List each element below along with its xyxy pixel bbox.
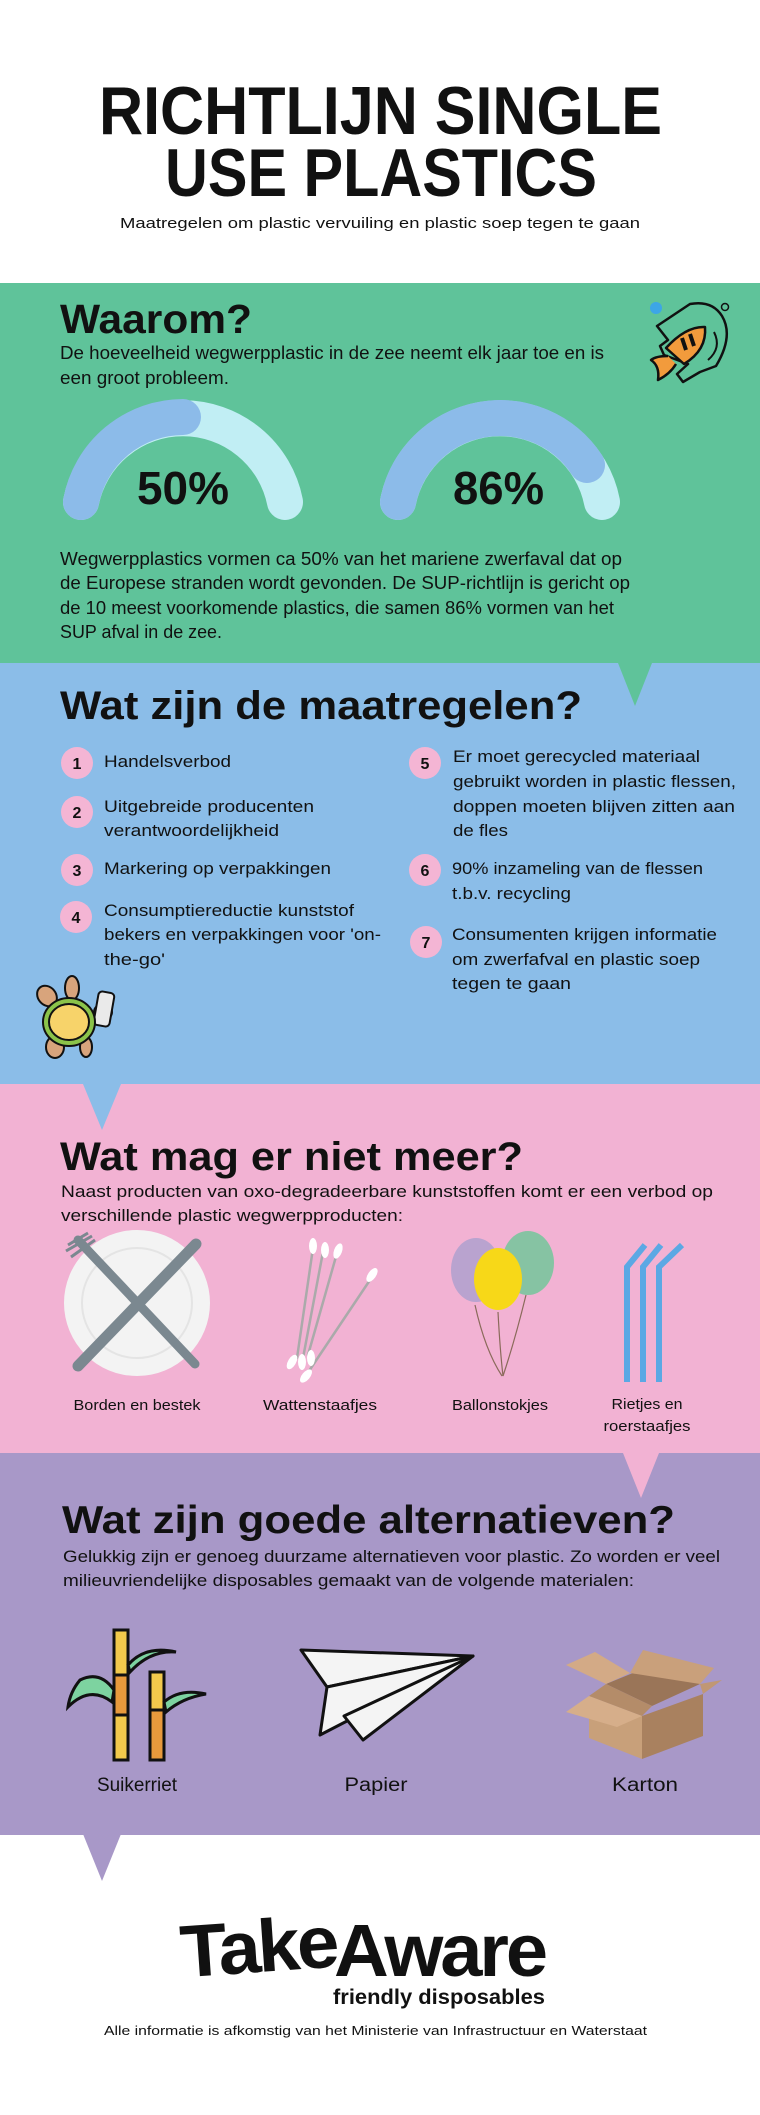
panel: niet meer xyxy=(0,1084,760,1453)
logo: TakeAware: Take xyxy=(177,1900,340,1993)
logo: TakeAware: Aware xyxy=(334,1909,546,1992)
list: measures: de fles xyxy=(453,821,508,840)
list: measures: 4 xyxy=(72,910,81,927)
logo: TakeAware: friendly disposables xyxy=(333,1986,545,2009)
panel: maatregelen xyxy=(0,663,760,1084)
list: measures: 2 xyxy=(73,805,82,822)
labels: materials xyxy=(97,1775,678,1796)
list: measures: 5 xyxy=(421,756,430,773)
list: measures: Markering op verpakkingen xyxy=(104,859,331,878)
list: measures: verantwoordelijkheid xyxy=(104,821,279,840)
icon: paper plane xyxy=(301,1650,473,1740)
icon: plate and cutlery xyxy=(64,1230,210,1376)
labels: materials: Papier xyxy=(344,1775,408,1796)
text block: explanation: SUP afval in de zee. xyxy=(60,622,222,642)
arrow: pink pointer xyxy=(623,1453,659,1498)
list: measures: Consumenten krijgen informatie xyxy=(452,925,717,944)
title xyxy=(99,73,662,211)
list: measures: 6 xyxy=(421,863,430,880)
list: measures: om zwerfafval en plastic soep xyxy=(452,950,700,969)
chart: gauge 86% xyxy=(398,418,602,514)
text block: intro: een groot probleem. xyxy=(60,368,229,388)
arrow: purple pointer xyxy=(83,1834,121,1881)
text block: alternatives intro xyxy=(63,1547,720,1590)
labels: banned items: Borden en bestek xyxy=(74,1397,201,1414)
labels: banned items: Rietjes en xyxy=(612,1396,682,1413)
labels: banned items xyxy=(74,1396,690,1435)
chart: gauge 50%: 50% xyxy=(137,462,229,514)
icon: turtle with bottle xyxy=(33,976,115,1058)
text block: alternatives intro: milieuvriendelijke disposables gemaakt van de volgende materialen: xyxy=(63,1571,634,1590)
text block: ban intro: Naast producten van oxo-degradeerbare kunststoffen komt er een verbod op xyxy=(61,1182,713,1201)
text block: explanation: de 10 meest voorkomende plastics, die samen 86% vormen van het xyxy=(60,598,614,618)
labels: materials: Karton xyxy=(612,1775,678,1796)
icon: straws xyxy=(627,1245,682,1382)
list: measures: Consumptiereductie kunststof xyxy=(104,901,354,920)
text block: explanation: de Europese stranden wordt gevonden. De SUP-richtlijn is gericht op xyxy=(60,573,630,593)
chart: gauge 50% xyxy=(81,417,285,514)
list: measures: doppen moeten blijven zitten aan xyxy=(453,797,735,816)
arrow: blue pointer xyxy=(83,1084,121,1130)
labels: banned items: Ballonstokjes xyxy=(452,1397,548,1414)
list: measures: 1 xyxy=(73,756,82,773)
labels: banned items: Wattenstaafjes xyxy=(263,1397,377,1414)
footer: source: Alle informatie is afkomstig van het Ministerie van Infrastructuur en Waterstaat xyxy=(104,2024,648,2038)
title: USE PLASTICS xyxy=(165,135,597,211)
subtitle: Maatregelen om plastic vervuiling en plastic soep tegen te gaan xyxy=(120,215,640,232)
text block: explanation: Wegwerpplastics vormen ca 50% van het mariene zwerfaval dat op xyxy=(60,549,622,569)
icon: balloons xyxy=(451,1231,554,1376)
icon: cardboard box xyxy=(566,1650,722,1759)
list: measures xyxy=(60,747,736,993)
text block: intro xyxy=(60,343,604,388)
heading: maatregelen: Wat zijn de maatregelen? xyxy=(60,684,582,728)
list: measures: 7 xyxy=(422,935,431,952)
list: measures: 3 xyxy=(73,863,82,880)
list: measures: t.b.v. recycling xyxy=(452,884,571,903)
heading: alternatieven: Wat zijn goede alternatieven? xyxy=(62,1499,675,1542)
list: measures: gebruikt worden in plastic flessen, xyxy=(453,772,736,791)
panel: alternatieven xyxy=(0,1453,760,1835)
list: measures: tegen te gaan xyxy=(452,974,571,993)
list: measures: Er moet gerecycled materiaal xyxy=(453,747,700,766)
panel: waarom xyxy=(0,283,760,664)
arrow: green pointer xyxy=(618,663,652,706)
text block: explanation xyxy=(60,549,630,642)
list: measures: Uitgebreide producenten xyxy=(104,797,314,816)
text block: intro: De hoeveelheid wegwerpplastic in de zee neemt elk jaar toe en is xyxy=(60,343,604,363)
icon: cotton swabs xyxy=(285,1238,380,1385)
text block: alternatives intro: Gelukkig zijn er genoeg duurzame alternatieven voor plastic. Zo worden er veel xyxy=(63,1547,720,1566)
list: measures: 90% inzameling van de flessen xyxy=(452,859,703,878)
list: measures: Handelsverbod xyxy=(104,752,231,771)
heading: niet meer: Wat mag er niet meer? xyxy=(60,1135,523,1179)
icon: sugarcane xyxy=(68,1630,206,1760)
chart: gauge 86%: 86% xyxy=(453,462,544,514)
list: measures: the-go' xyxy=(104,950,165,969)
text block: ban intro: verschillende plastic wegwerpproducten: xyxy=(61,1206,403,1225)
logo: TakeAware xyxy=(177,1900,546,2009)
icon: fish in plastic xyxy=(650,302,728,382)
title: RICHTLIJN SINGLE xyxy=(99,73,662,149)
heading: waarom: Waarom? xyxy=(60,296,252,342)
text block: ban intro xyxy=(61,1182,713,1225)
labels: materials: Suikerriet xyxy=(97,1775,178,1796)
labels: banned items: roerstaafjes xyxy=(604,1418,690,1435)
list: measures: bekers en verpakkingen voor 'on- xyxy=(104,925,381,944)
